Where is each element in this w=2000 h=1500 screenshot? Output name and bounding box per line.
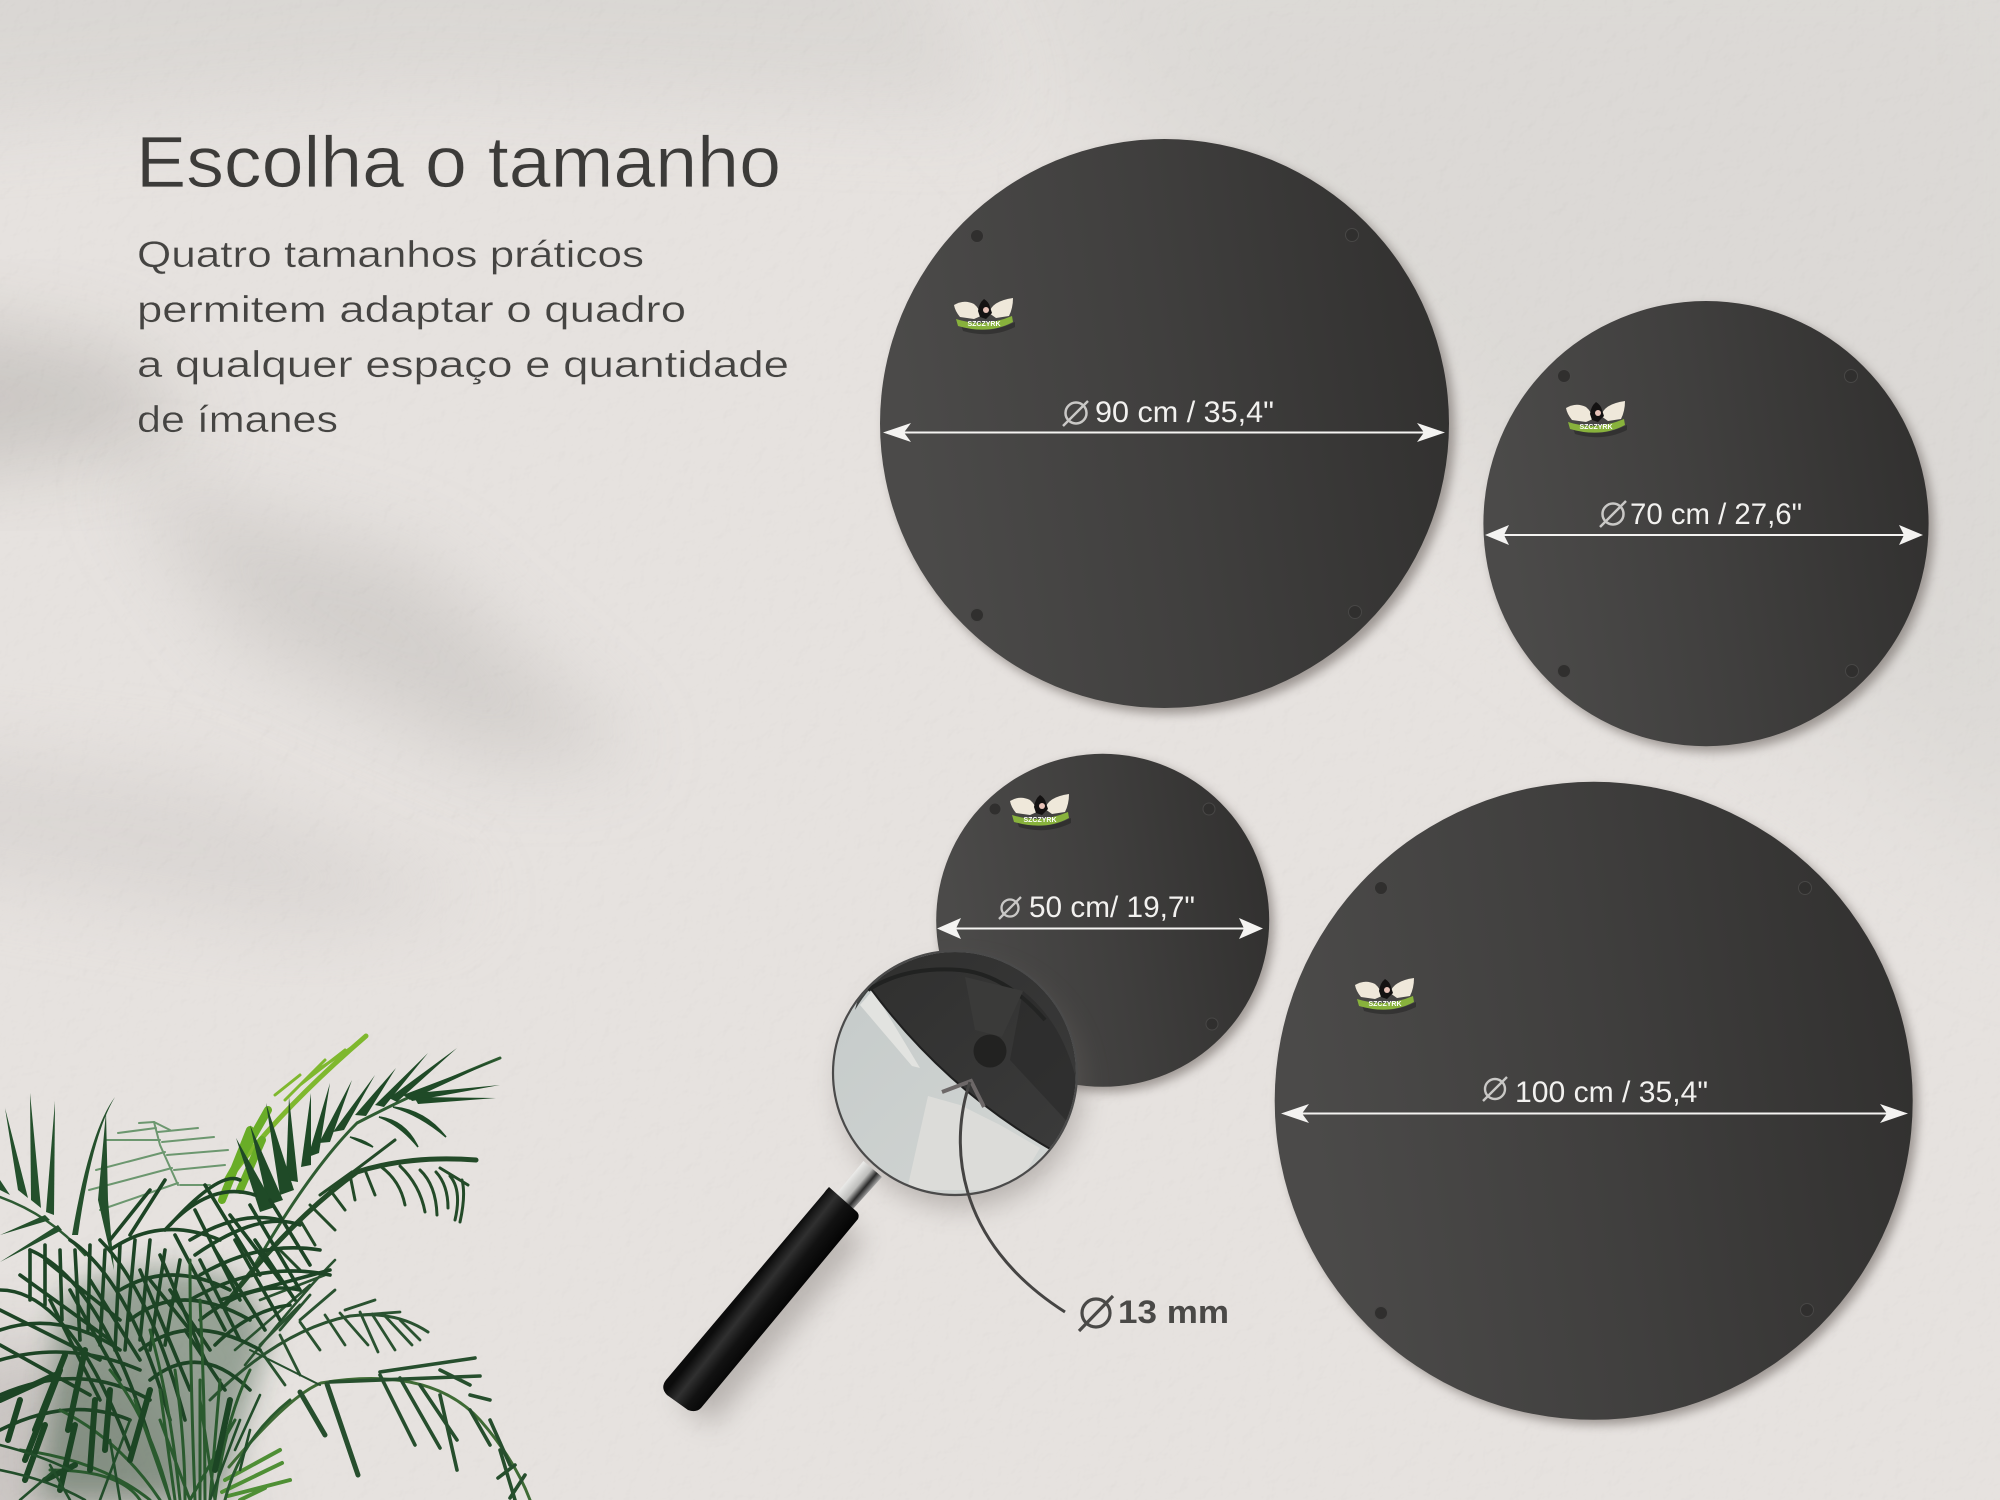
magnet on 50 cm board: SZCZYRK <box>1023 817 1057 824</box>
board: 70 cm <box>1483 301 1934 752</box>
magnifier handle <box>663 1161 882 1411</box>
frond lower right <box>229 1350 530 1500</box>
magnet on 90 cm board: SZCZYRK <box>967 321 1001 328</box>
intro text block: a qualquer espaço e quantidade <box>137 344 789 385</box>
board: 50 cm <box>936 754 1274 1092</box>
magnet on 90 cm board <box>954 298 1015 334</box>
dimension arrow 70 cm <box>1485 525 1923 545</box>
pointer curve <box>960 1082 1065 1312</box>
magnet on 100 cm board: SZCZYRK <box>1368 1001 1402 1008</box>
bright basal leaflets <box>222 1450 290 1500</box>
label 100 cm: 100 cm / 35,4" <box>1515 1076 1708 1109</box>
lens ring <box>833 951 1077 1195</box>
label 13 mm: 13 mm <box>1118 1294 1229 1330</box>
magnifier shadow <box>678 967 1081 1424</box>
pale back frond <box>89 1122 228 1210</box>
magnet on 70 cm board: SZCZYRK <box>1579 424 1613 431</box>
magnified board <box>872 952 1076 1148</box>
frond middle right <box>210 1260 428 1400</box>
intro text block: permitem adaptar o quadro <box>137 289 686 330</box>
lower stems and leaves <box>20 1260 290 1500</box>
diameter icon 100 cm <box>1483 1077 1507 1101</box>
palm plant <box>0 1036 530 1500</box>
magnifier lens <box>834 952 1076 1194</box>
magnified mounting dot <box>974 1034 1006 1068</box>
dark mass under plant <box>40 1269 270 1500</box>
magnet on 50 cm board <box>1010 794 1071 830</box>
board: 90 cm <box>880 139 1455 714</box>
intro text block: de ímanes <box>137 399 338 440</box>
label 70 cm: 70 cm / 27,6" <box>1630 498 1802 531</box>
magnet on 100 cm board <box>1355 978 1416 1014</box>
diameter icon 90 cm <box>1063 401 1088 426</box>
board: 100 cm <box>1275 782 1918 1425</box>
lens highlight wedges <box>907 1096 1040 1190</box>
mounting dots 50 cm <box>989 803 1218 1030</box>
dimension arrow 100 cm <box>1281 1104 1908 1123</box>
intro text block: Quatro tamanhos práticos <box>137 234 644 275</box>
label 90 cm: 90 cm / 35,4" <box>1095 396 1274 429</box>
diameter icon 50 cm <box>999 897 1021 919</box>
diameter icon 13 mm <box>1079 1296 1113 1331</box>
frond top right <box>236 1048 500 1265</box>
frond drooping upper <box>225 1140 476 1305</box>
mounting dots 70 cm <box>1558 370 1858 678</box>
dimension arrow 50 cm <box>937 918 1263 939</box>
lens inner rim <box>855 976 882 1010</box>
intro text block <box>137 234 789 440</box>
dense central leaves <box>0 1178 330 1450</box>
diameter icon 70 cm <box>1600 501 1626 527</box>
frond top left <box>0 1093 115 1270</box>
reflection on board <box>1002 986 1022 998</box>
light green new frond <box>222 1036 366 1200</box>
mounting dots 90 cm <box>970 228 1362 622</box>
magnet on 70 cm board <box>1566 401 1627 437</box>
heading: Escolha o tamanho <box>136 123 781 203</box>
magnifying glass <box>663 930 1090 1424</box>
dimension arrow 90 cm <box>883 423 1445 442</box>
label 50 cm: 50 cm/ 19,7" <box>1029 891 1195 924</box>
arrowhead in lens <box>942 1081 984 1107</box>
mounting dots 100 cm <box>1374 882 1814 1320</box>
